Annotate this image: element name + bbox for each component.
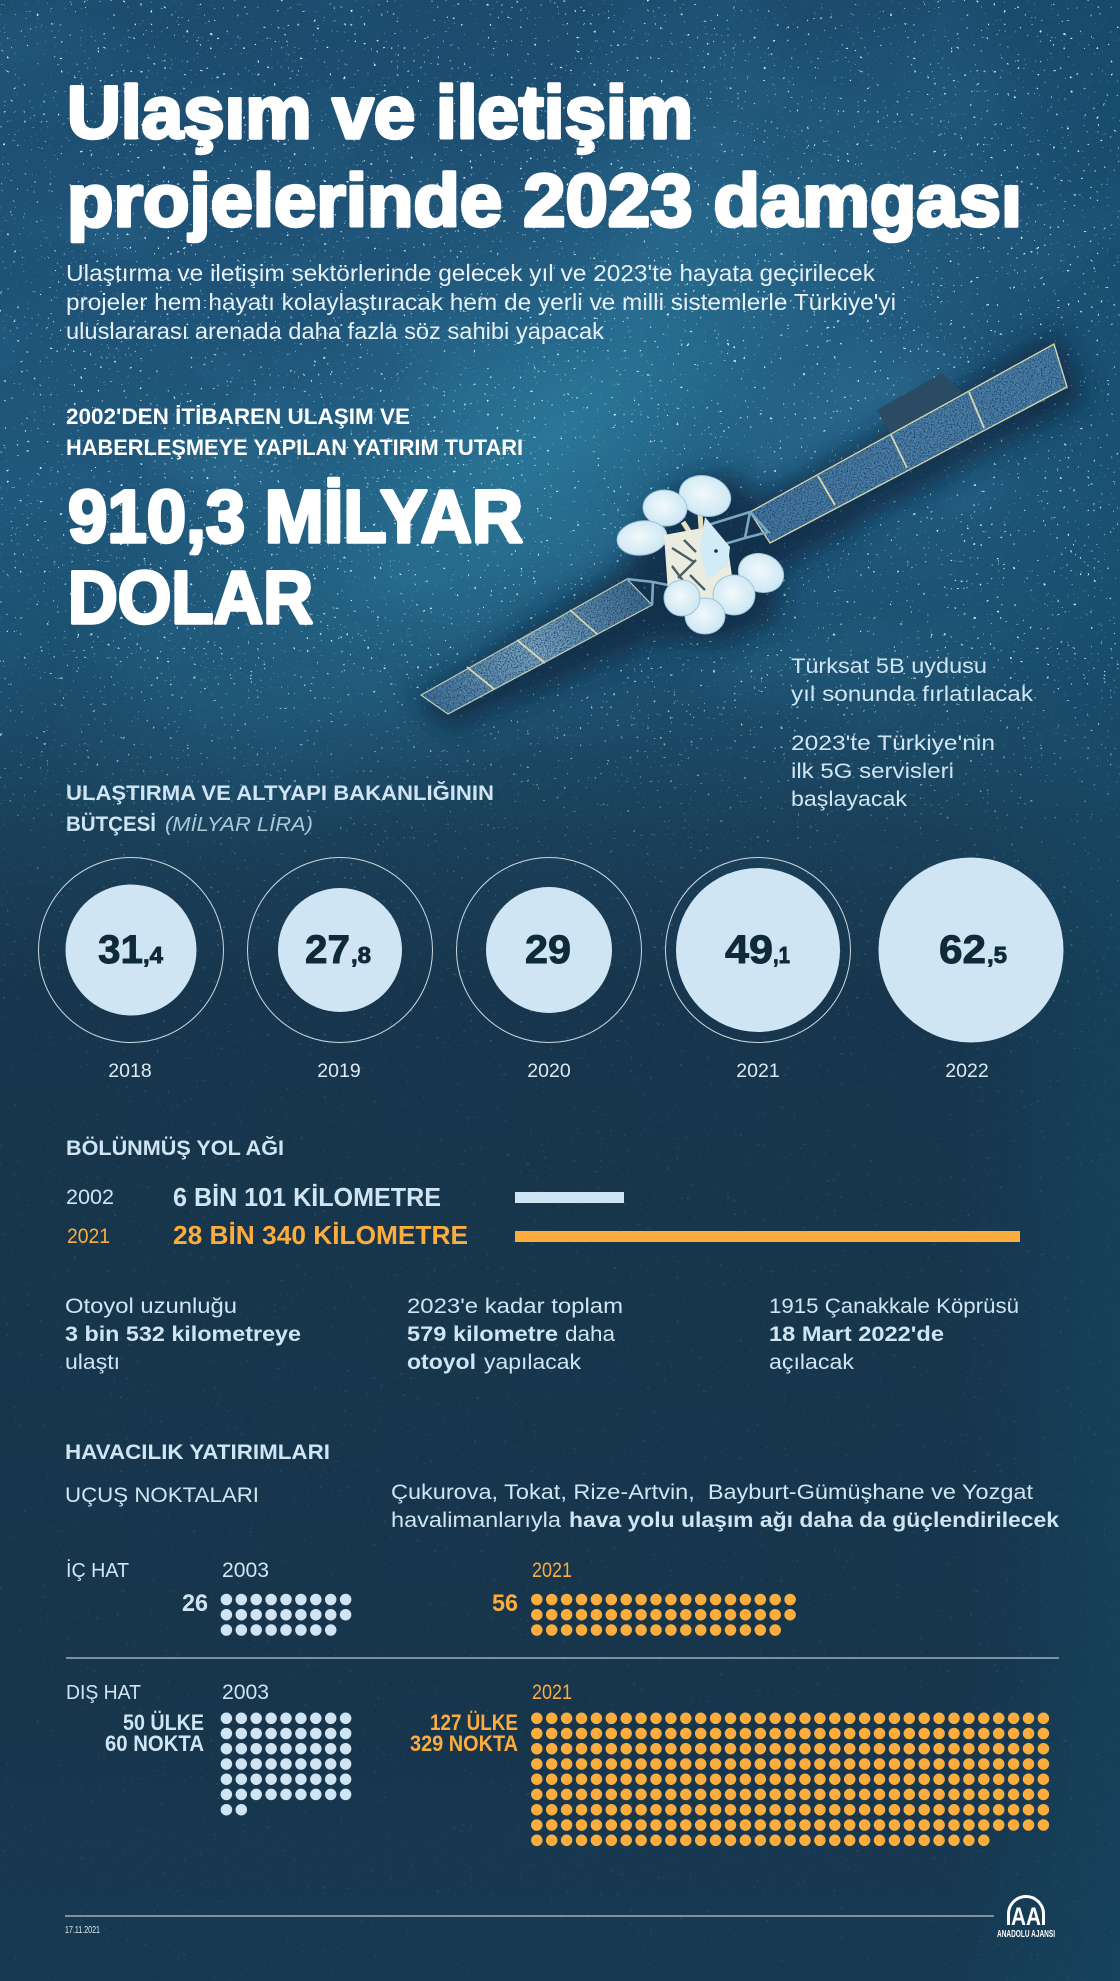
- budget circles chart: [38, 858, 1064, 1082]
- investment label: HABERLEŞMEYE YAPILAN YATIRIM TUTARI: [66, 435, 523, 460]
- satellite notes: Türksat 5B uydusu: [791, 655, 987, 678]
- row 2021: 28 BİN 340 KİLOMETRE: [173, 1220, 468, 1250]
- motorway 2023 note: otoyol: [407, 1351, 476, 1374]
- circle 2018: [38, 858, 224, 1082]
- budget heading: BÜTÇESİ: [66, 813, 156, 836]
- title: Ulaşım ve iletişim: [67, 71, 693, 154]
- international 2003 dots: 2003: [222, 1681, 269, 1704]
- bridge note: 18 Mart 2022'de: [769, 1323, 944, 1346]
- logo: Anadolu Ajansı: ANADOLU AJANSI: [997, 1929, 1055, 1940]
- circle 2020: 2020: [527, 1060, 571, 1082]
- circle 2018: 2018: [108, 1060, 152, 1082]
- circle 2022: ,5: [987, 942, 1007, 968]
- motorway length note: 3 bin 532 kilometreye: [65, 1323, 301, 1346]
- international 2003 dots: 50 ÜLKE: [123, 1710, 204, 1735]
- international 2003 dots: [105, 1681, 346, 1810]
- international 2021 dots: 329 NOKTA: [410, 1731, 518, 1756]
- dark back panel: [877, 373, 962, 435]
- circle 2021: [666, 858, 850, 1082]
- investment amount: 910,3 MİLYAR: [68, 475, 523, 558]
- international 2021 dots: [410, 1681, 1044, 1840]
- motorway 2023 note: daha: [565, 1323, 615, 1346]
- satellite notes: ilk 5G servisleri: [791, 760, 954, 783]
- motorway length note: [65, 1295, 301, 1374]
- flight points subheading: UÇUŞ NOKTALARI: [65, 1484, 259, 1507]
- domestic 2003 dots: [182, 1559, 346, 1630]
- domestic label: İÇ HAT: [66, 1559, 129, 1582]
- road network heading: BÖLÜNMÜŞ YOL AĞI: [66, 1136, 284, 1160]
- bridge note: açılacak: [769, 1351, 855, 1374]
- motorway 2023 note: [407, 1295, 623, 1374]
- title: projelerinde 2023 damgası: [67, 159, 1022, 242]
- aviation heading: HAVACILIK YATIRIMLARI: [65, 1441, 330, 1464]
- circle 2019: 27: [305, 928, 350, 972]
- dish antennas: [615, 470, 789, 599]
- intro text: uluslararası arenada daha fazla söz sahibi yapacak: [66, 318, 605, 344]
- domestic 2003 dots: 26: [182, 1590, 208, 1617]
- satellite notes: başlayacak: [791, 788, 908, 811]
- circle 2019: ,8: [351, 942, 371, 968]
- airports note: Çukurova, Tokat, Rize-Artvin, Bayburt-Gümüşhane ve Yozgat: [391, 1481, 1033, 1504]
- row 2021: [67, 1220, 1020, 1250]
- satellite notes: yıl sonunda fırlatılacak: [791, 683, 1034, 706]
- lower dish antennas: [664, 575, 755, 634]
- bridge note: [769, 1295, 1019, 1374]
- investment label: 2002'DEN İTİBAREN ULAŞIM VE: [66, 404, 410, 429]
- investment amount: DOLAR: [68, 556, 313, 639]
- left solar wing: [421, 579, 652, 714]
- row 2002: 6 BİN 101 KİLOMETRE: [173, 1182, 441, 1212]
- circle 2018: 31: [98, 928, 143, 972]
- title: [67, 71, 1022, 242]
- section divider: [66, 1658, 1059, 1659]
- airports note: hava yolu ulaşım ağı daha da güçlendirilecek: [569, 1509, 1059, 1532]
- footer line: [65, 1916, 994, 1917]
- row 2002: 2002: [66, 1186, 114, 1209]
- logo: Anadolu Ajansı: AA: [1011, 1903, 1041, 1931]
- domestic 2021 dots: [492, 1559, 790, 1630]
- intro text: Ulaştırma ve iletişim sektörlerinde gelecek yıl ve 2023'te hayata geçirilecek: [66, 260, 876, 286]
- international 2021 dots: 127 ÜLKE: [430, 1710, 518, 1735]
- international 2021 dots: 2021: [532, 1681, 572, 1704]
- motorway length note: Otoyol uzunluğu: [65, 1295, 237, 1318]
- airports note: havalimanlarıyla: [391, 1509, 561, 1532]
- airports note: [391, 1481, 1059, 1532]
- date: 17.11.2021: [65, 1925, 100, 1936]
- budget heading: ULAŞTIRMA VE ALTYAPI BAKANLIĞININ: [66, 781, 494, 805]
- satellite notes: [791, 655, 1034, 811]
- circle 2020: 29: [525, 928, 571, 972]
- satellite notes: 2023'te Türkiye'nin: [791, 732, 995, 755]
- row 2021: 2021: [67, 1225, 110, 1248]
- international flights: [66, 1681, 1044, 1840]
- international 2003 dots: 60 NOKTA: [105, 1731, 204, 1756]
- right solar wing: [750, 344, 1067, 543]
- investment label: [66, 404, 523, 460]
- international label: DIŞ HAT: [66, 1682, 141, 1704]
- satellite illustration: [415, 330, 1085, 730]
- circle 2018: ,4: [143, 942, 163, 968]
- circle 2022: [878, 858, 1064, 1082]
- domestic 2021 dots: 2021: [532, 1559, 572, 1582]
- circle 2021: 49: [725, 928, 773, 972]
- circle 2021: ,1: [773, 942, 790, 968]
- intro text: [66, 260, 896, 344]
- road network bars: [66, 1182, 1020, 1250]
- circle 2022: 62: [939, 928, 986, 972]
- struts: [627, 512, 768, 605]
- satellite bus: [664, 517, 734, 612]
- budget heading: [66, 781, 494, 836]
- circle 2020: [456, 858, 642, 1082]
- bridge note: 1915 Çanakkale Köprüsü: [769, 1295, 1019, 1318]
- satellite shadow: [415, 330, 1085, 730]
- motorway 2023 note: 2023'e kadar toplam: [407, 1295, 623, 1318]
- motorway 2023 note: 579 kilometre: [407, 1323, 558, 1346]
- investment amount: [68, 475, 523, 639]
- domestic flights: [66, 1559, 790, 1630]
- motorway length note: ulaştı: [65, 1351, 120, 1374]
- domestic 2021 dots: 56: [492, 1590, 518, 1617]
- budget heading: (MİLYAR LİRA): [165, 814, 313, 836]
- circle 2019: 2019: [317, 1060, 361, 1082]
- row 2002: [66, 1182, 624, 1212]
- intro text: projeler hem hayatı kolaylaştıracak hem de yerli ve milli sistemlerle Türkiye'yi: [66, 289, 896, 315]
- dish arms: [660, 514, 702, 552]
- motorway 2023 note: yapılacak: [484, 1351, 582, 1374]
- circle 2019: [248, 858, 432, 1082]
- circle 2021: 2021: [736, 1060, 780, 1082]
- domestic 2003 dots: 2003: [222, 1559, 269, 1582]
- circle 2022: 2022: [945, 1060, 989, 1082]
- logo: Anadolu Ajansı: [997, 1896, 1055, 1940]
